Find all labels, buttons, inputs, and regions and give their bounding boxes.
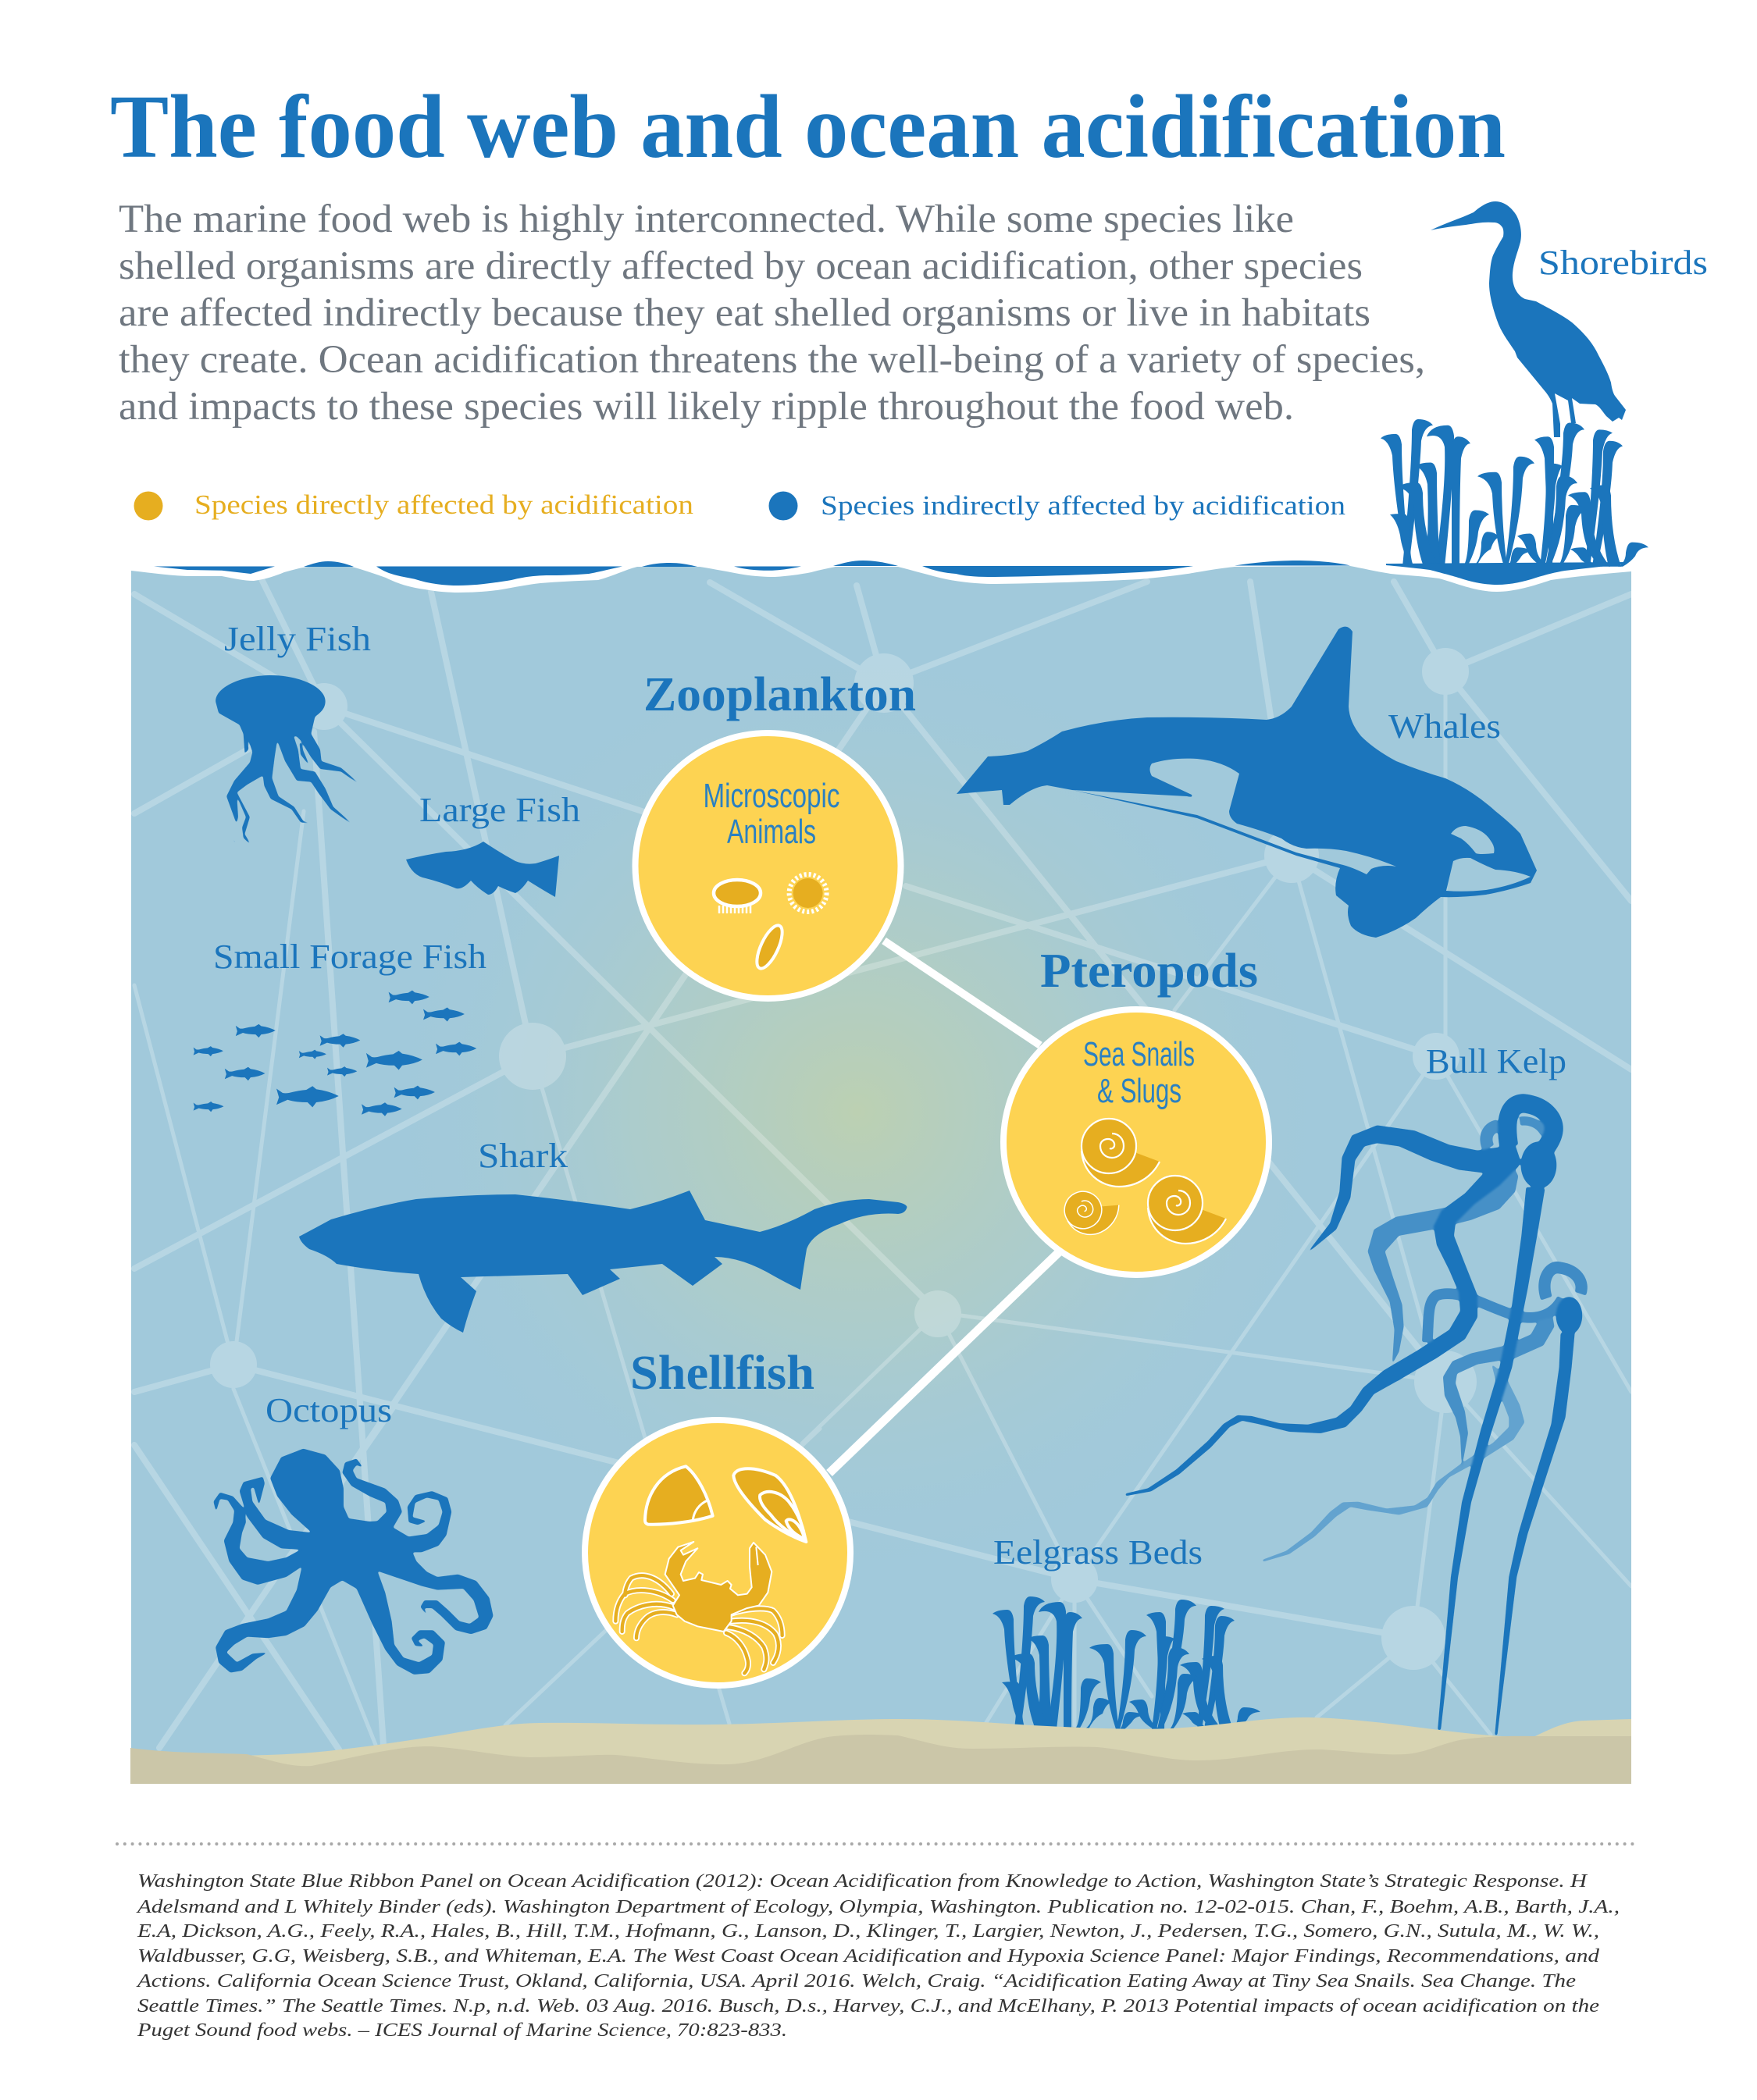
panel: zooplankton circle [636,733,901,998]
icon: shorebird [1431,201,1626,437]
icon: large fish [406,842,559,897]
intro text block: are affected indirectly because they eat shelled organisms or live in habitats [119,291,1370,335]
intro text block [119,198,1425,429]
dotted divider [117,1842,1638,1846]
heading: shellfish: Shellfish [630,1347,814,1400]
intro text block: The marine food web is highly interconnected. While some species like [119,198,1294,241]
icon: mussel [733,1468,806,1542]
label: small forage fish: Small Forage Fish [213,938,486,976]
legend: indirectly affected: Species indirectly affected by acidification [821,490,1345,521]
seabed sand [130,1717,1631,1784]
heading: pteropods: Pteropods [1040,945,1258,998]
label: jelly fish: Jelly Fish [224,620,371,658]
references text: Washington State Blue Ribbon Panel on Ocean Acidification (2012): Ocean Acidification from Knowledge to Action, Washington State’s Strategic Response. H [137,1871,1588,1892]
text: sea snails and slugs: Sea Snails [1083,1035,1195,1073]
kelp: dark fronds [1125,1103,1554,1496]
text: microscopic animals [703,777,840,851]
icon: octopus [213,1449,494,1675]
intro text block: shelled organisms are directly affected by ocean acidification, other species [119,244,1363,288]
connector: zooplankton to pteropods [884,941,1040,1045]
intro text block: and impacts to these species will likely ripple throughout the food web. [119,385,1294,429]
icon: crab [615,1542,782,1673]
icon: school of small fish [194,991,476,1116]
text: sea snails and slugs [1083,1035,1195,1110]
label: bull kelp: Bull Kelp [1426,1042,1566,1080]
label: shorebirds: Shorebirds [1538,244,1708,282]
icon: jelly fish [216,675,365,850]
kelp: stipes and bulbs [1438,1141,1582,1735]
text: microscopic animals: Microscopic [703,777,840,815]
references text: Adelsmand and L Whitely Binder (eds). Washington Department of Ecology, Olympia, Washington. Publication no. 12-02-015. Chan, F., Boehm, A.B., Barth, J.A., [136,1897,1620,1917]
references text: E.A, Dickson, A.G., Feely, R.A., Hales, B., Hill, T.M., Hofmann, G., Lanson, D., Klinger, T., Largier, Newton, J., Pedersen, T.G., Somero, G.N., Sutula, M., W. W., [137,1921,1599,1942]
icon: bull kelp [1125,1103,1582,1735]
icon: barnacle [645,1466,713,1525]
legend [134,489,1345,521]
label: octopus: Octopus [266,1391,392,1429]
icon: shoreline reeds [1381,419,1648,567]
icon: snail shells [1058,1119,1226,1244]
connector: pteropods to shellfish [829,1251,1060,1473]
text: microscopic animals: Animals [727,813,816,851]
references text: Actions. California Ocean Science Trust, Okland, California, USA. April 2016. Welch, Craig. “Acidification Eating Away at Tiny Sea Snails. Sea Change. The [136,1971,1576,1991]
label: eelgrass beds: Eelgrass Beds [993,1533,1203,1571]
icon: shark [299,1191,907,1333]
surface water shapes [154,561,1627,586]
panel: ocean [131,566,1631,1784]
label: whales: Whales [1388,707,1501,746]
references text: Puget Sound food webs. – ICES Journal of Marine Science, 70:823-833. [137,2020,787,2041]
icon: eelgrass beds [993,1596,1260,1729]
food web network [134,579,1631,1749]
label: large fish: Large Fish [419,791,580,829]
references text: Seattle Times.” The Seattle Times. N.p, n.d. Web. 03 Aug. 2016. Busch, D.s., Harvey, C.J., and McElhany, P. 2013 Potential impacts of ocean acidification on the [137,1996,1599,2016]
references text [136,1871,1620,2041]
heading: zooplankton: Zooplankton [643,668,916,721]
icon: zooplankton [714,874,827,972]
title: The food web and ocean acidification [110,77,1506,177]
panel: pteropods circle [1003,1009,1269,1275]
references text: Waldbusser, G.G, Weisberg, S.B., and Whiteman, E.A. The West Coast Ocean Acidification and Hypoxia Science Panel: Major Findings, Recommendations, and [137,1946,1600,1967]
text: sea snails and slugs: & Slugs [1097,1072,1181,1110]
panel: shellfish circle [585,1420,850,1685]
kelp: mid-tone fronds [1367,1121,1581,1468]
kelp: pale lower frond [1263,1365,1524,1562]
legend: directly affected: Species directly affected by acidification [194,489,693,520]
icon: orca whale [957,627,1537,938]
intro text block: they create. Ocean acidification threatens the well-being of a variety of species, [119,338,1425,382]
label: shark: Shark [478,1137,568,1175]
